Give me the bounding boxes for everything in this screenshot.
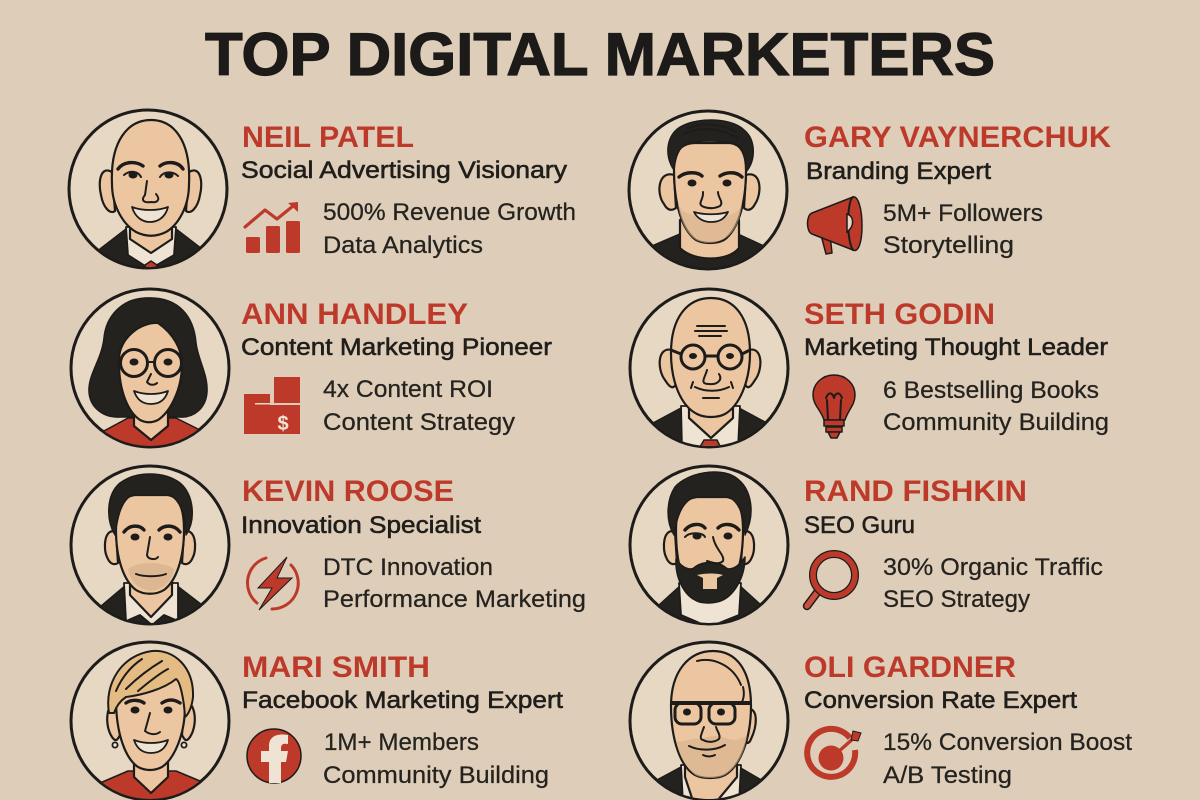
icon: lightning bolt in ring xyxy=(247,557,298,610)
stats: Ann Handley: 4x Content ROI xyxy=(323,376,493,403)
card: Kevin Roose xyxy=(71,466,586,625)
card: Seth Godin xyxy=(630,289,1109,452)
role: Ann Handley: Content Marketing Pioneer xyxy=(241,334,552,361)
stats: Oli Gardner xyxy=(883,729,1132,789)
stats: Rand Fishkin: SEO Strategy xyxy=(883,586,1030,613)
stats: Gary Vaynerchuk: 5M+ Followers xyxy=(883,200,1043,227)
stats: Gary Vaynerchuk: Storytelling xyxy=(883,232,1014,259)
stats: Seth Godin: Community Building xyxy=(883,409,1109,436)
name: Ann Handley: ANN HANDLEY xyxy=(241,298,468,331)
stats: Gary Vaynerchuk xyxy=(883,200,1043,259)
role: Rand Fishkin: SEO Guru xyxy=(804,512,915,539)
stats: Mari Smith: 1M+ Members xyxy=(324,729,479,756)
icon: magnifying glass xyxy=(807,554,855,606)
portrait: Seth Godin xyxy=(630,289,788,452)
card: Rand Fishkin xyxy=(630,466,1103,627)
name: Gary Vaynerchuk: GARY VAYNERCHUK xyxy=(804,121,1111,154)
stats: Kevin Roose: Performance Marketing xyxy=(323,586,586,613)
stats: Kevin Roose: DTC Innovation xyxy=(323,554,493,581)
portrait: Rand Fishkin xyxy=(630,466,788,627)
name: Neil Patel: NEIL PATEL xyxy=(242,121,414,154)
name: Rand Fishkin: RAND FISHKIN xyxy=(804,475,1027,508)
portrait: Neil Patel xyxy=(69,110,227,273)
stats: Ann Handley: Content Strategy xyxy=(323,409,515,436)
portrait: Ann Handley xyxy=(71,289,229,448)
role: Mari Smith: Facebook Marketing Expert xyxy=(242,687,563,714)
portrait: Kevin Roose xyxy=(71,466,229,625)
stats: Neil Patel xyxy=(323,199,576,259)
name: Kevin Roose: KEVIN ROOSE xyxy=(242,475,454,508)
stats: Ann Handley xyxy=(323,376,515,436)
card: Ann Handley xyxy=(71,289,552,448)
stats: Rand Fishkin: 30% Organic Traffic xyxy=(883,554,1103,581)
portrait: Mari Smith xyxy=(71,642,229,800)
role: Gary Vaynerchuk: Branding Expert xyxy=(806,158,991,185)
role: Kevin Roose: Innovation Specialist xyxy=(241,512,481,539)
card: Oli Gardner xyxy=(630,642,1132,800)
name: Oli Gardner: OLI GARDNER xyxy=(804,651,1016,684)
stats: Rand Fishkin xyxy=(883,554,1103,613)
stats: Oli Gardner: 15% Conversion Boost xyxy=(883,729,1132,756)
card: Neil Patel xyxy=(69,110,576,273)
stats: Mari Smith: Community Building xyxy=(323,762,549,789)
name: Mari Smith: MARI SMITH xyxy=(242,651,430,684)
icon: light bulb xyxy=(813,375,855,438)
role: Seth Godin: Marketing Thought Leader xyxy=(804,334,1108,361)
title: TOP DIGITAL MARKETERS xyxy=(205,21,995,88)
role: Oli Gardner: Conversion Rate Expert xyxy=(804,687,1077,714)
portrait: Oli Gardner xyxy=(630,642,788,800)
stats: Oli Gardner: A/B Testing xyxy=(883,762,1012,789)
card: Gary Vaynerchuk xyxy=(629,111,1111,270)
stats: Neil Patel: Data Analytics xyxy=(323,232,483,259)
stats: Mari Smith xyxy=(323,729,549,789)
icon: facebook logo xyxy=(247,729,301,783)
stats: Seth Godin xyxy=(883,377,1109,436)
card: Mari Smith xyxy=(71,642,563,800)
icon: folder with dollar sign: $ xyxy=(277,413,289,435)
stats: Kevin Roose xyxy=(323,554,586,613)
icon: target with arrow xyxy=(807,729,861,777)
name: Seth Godin: SETH GODIN xyxy=(804,298,995,331)
stats: Seth Godin: 6 Bestselling Books xyxy=(883,377,1099,404)
icon: bar chart with arrow xyxy=(245,202,300,253)
portrait: Gary Vaynerchuk xyxy=(629,111,787,270)
icon: megaphone xyxy=(808,197,862,254)
stats: Neil Patel: 500% Revenue Growth xyxy=(323,199,576,226)
role: Neil Patel: Social Advertising Visionary xyxy=(241,157,567,184)
icon: folder with dollar sign xyxy=(244,377,300,435)
